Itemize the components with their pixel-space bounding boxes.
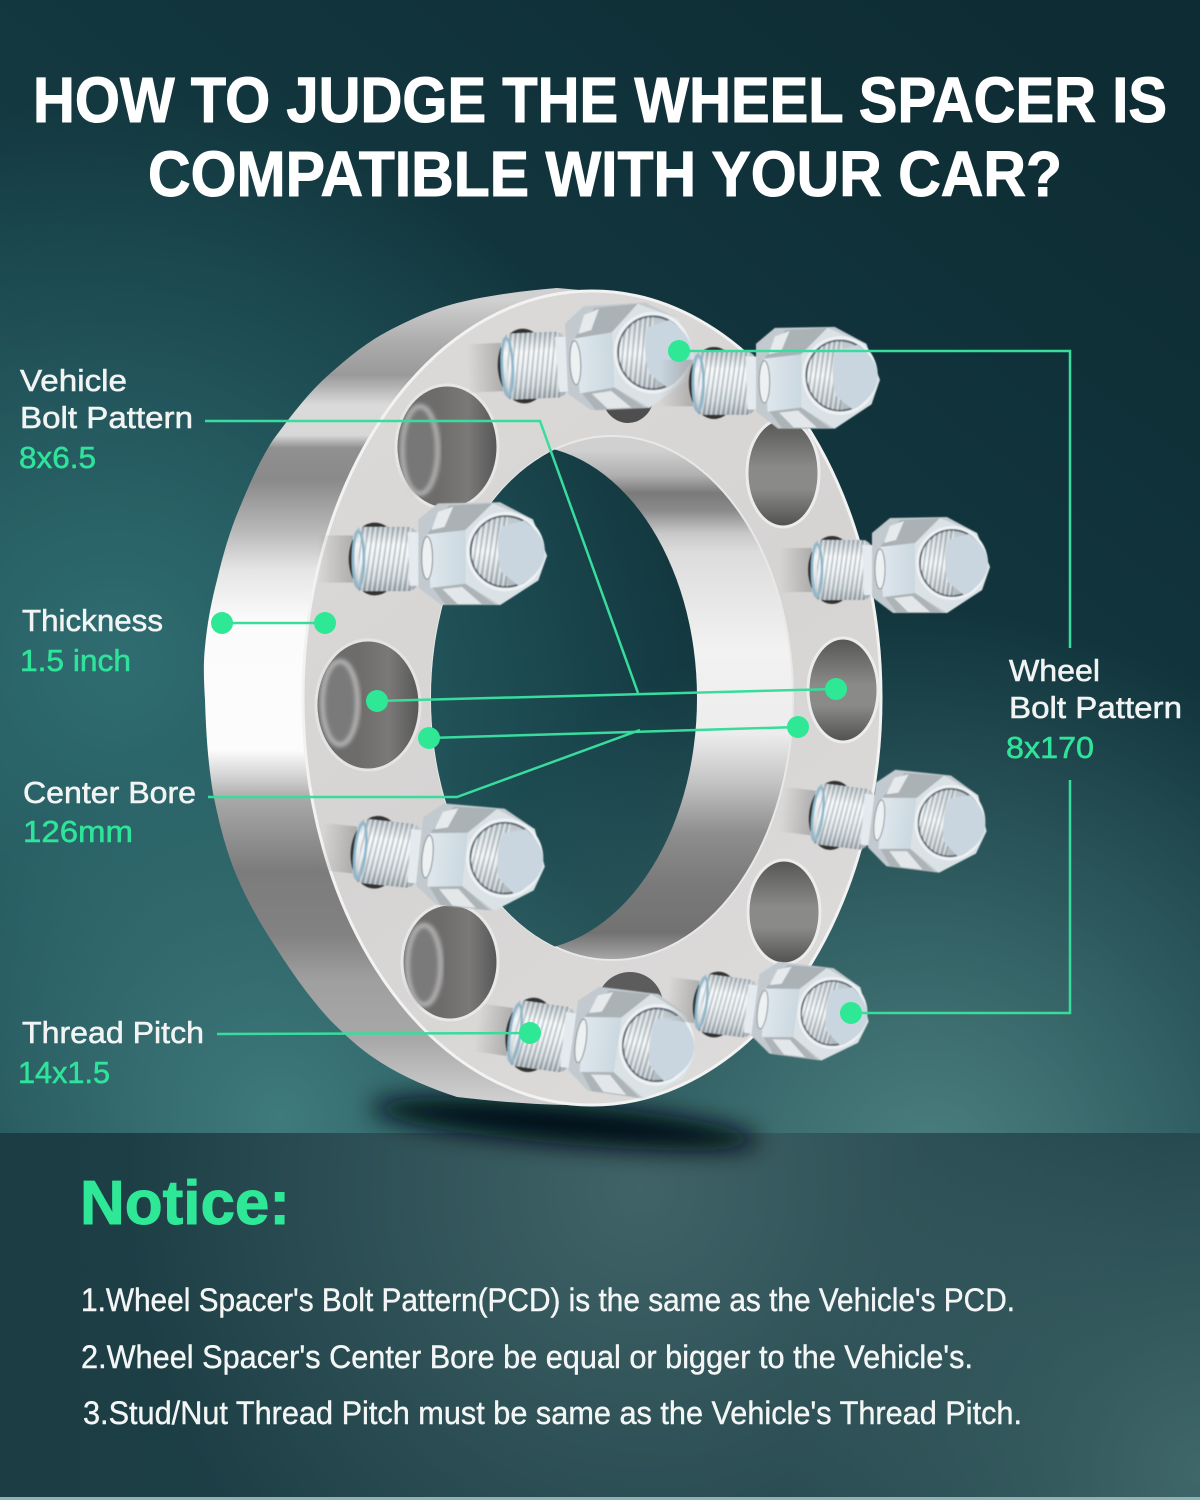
label: thread pitch: [18, 1015, 204, 1090]
label: thickness: [20, 603, 163, 678]
bolt: right lower: [777, 756, 993, 878]
bolt: bottom right: [661, 947, 875, 1066]
ring drop shadow: [369, 1087, 761, 1161]
bolt: top: [465, 300, 696, 416]
notice list: 1.Wheel Spacer's Bolt Pattern(PCD) is the same as the Vehicle's PCD.: [81, 1282, 1015, 1318]
center bore: [430, 435, 794, 961]
panel: notice background: [0, 1133, 1200, 1500]
notice heading: Notice:: [80, 1169, 290, 1238]
label: center bore: Center Bore: [23, 775, 196, 810]
label: center bore: 126mm: [23, 814, 133, 849]
notice list: 3.Stud/Nut Thread Pitch must be same as the Vehicle's Thread Pitch.: [83, 1395, 1022, 1431]
background: upper area: [0, 0, 1200, 1133]
spacer front face: [302, 290, 882, 1106]
label: thread pitch: Thread Pitch: [22, 1015, 204, 1050]
callout lines: vehicle bolt pattern: [205, 421, 847, 712]
title: [33, 64, 1167, 210]
callout lines: wheel bolt pattern: [668, 340, 1070, 1024]
spacer outer band: [204, 288, 592, 1105]
bolt: top right: [659, 327, 880, 429]
callout lines: center bore: [208, 716, 809, 797]
label: thread pitch: 14x1.5: [18, 1055, 110, 1090]
label: vehicle bolt pattern: Vehicle: [20, 363, 127, 398]
bolt: right middle: [780, 517, 990, 613]
label: wheel bolt pattern: [1006, 653, 1182, 765]
notice list: [81, 1282, 1022, 1431]
label: vehicle bolt pattern: 8x6.5: [19, 440, 96, 475]
bolt holes: [316, 367, 878, 1038]
label: vehicle bolt pattern: Bolt Pattern: [20, 400, 193, 435]
bolt: bottom: [470, 970, 703, 1105]
label: thickness: Thickness: [22, 603, 163, 638]
wheel spacer illustration: [204, 288, 991, 1106]
callout lines: thickness: [211, 612, 336, 634]
title: COMPATIBLE WITH YOUR CAR?: [148, 138, 1062, 210]
label: thickness: 1.5 inch: [20, 643, 131, 678]
label: wheel bolt pattern: Wheel: [1009, 653, 1100, 688]
callout lines: thread pitch: [217, 1022, 541, 1044]
bolt: left lower: [316, 790, 550, 916]
label: vehicle bolt pattern: [19, 363, 193, 475]
label: center bore: [23, 775, 196, 849]
label: wheel bolt pattern: Bolt Pattern: [1009, 690, 1182, 725]
notice list: 2.Wheel Spacer's Center Bore be equal or bigger to the Vehicle's.: [81, 1339, 973, 1375]
bolt: left middle: [318, 502, 547, 605]
label: wheel bolt pattern: 8x170: [1006, 730, 1094, 765]
